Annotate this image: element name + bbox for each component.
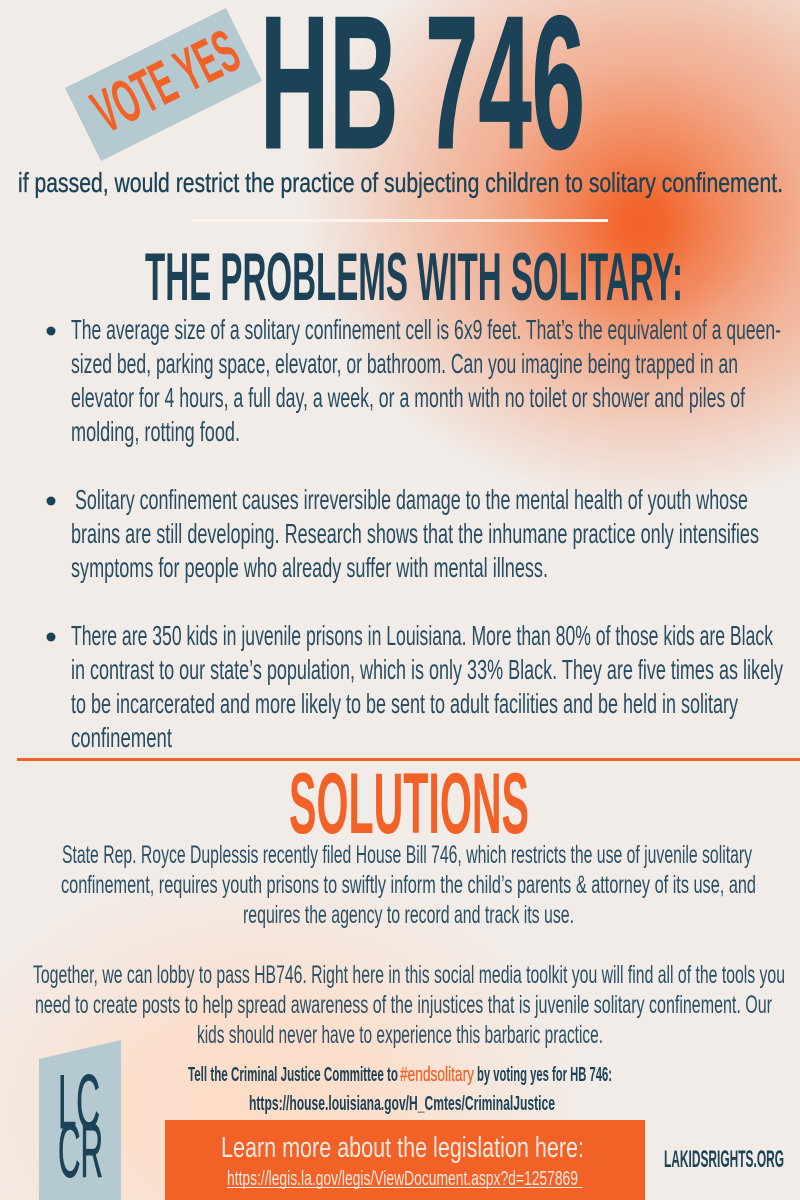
text block: solutions paragraph 2 xyxy=(33,961,785,1049)
bullet 3: confinement xyxy=(71,722,172,753)
logo: LCCR: CR xyxy=(58,1109,103,1194)
call to action: committee: Tell the Criminal Justice Committee to xyxy=(188,1064,398,1086)
bullet 1: molding, rotting food. xyxy=(71,416,240,447)
bullet 2: symptoms for people who already suffer with mental illness. xyxy=(71,552,548,583)
call to action: committee: #endsolitary xyxy=(400,1064,474,1086)
call to action: committee: https://house.louisiana.gov/H_Cmtes/CriminalJustice xyxy=(249,1093,555,1115)
call to action: committee xyxy=(188,1064,612,1115)
logo: LCCR: LC xyxy=(58,1060,100,1145)
text block: solutions paragraph 1: requires the agency to record and track its use. xyxy=(243,901,574,929)
bullet 1 xyxy=(46,314,781,447)
badge: vote yes xyxy=(65,8,262,161)
bullet 3 xyxy=(46,620,783,753)
infographic page: SOLUTIONS xyxy=(289,756,529,852)
bullet 2 xyxy=(46,484,759,583)
call to action: committee: by voting yes for HB 746: xyxy=(477,1064,612,1086)
panel: learn more xyxy=(165,1120,645,1200)
panel: problems list xyxy=(46,314,783,753)
logo: LCCR xyxy=(39,1040,121,1200)
text block: solutions paragraph 1 xyxy=(61,841,756,929)
panel: learn more: Learn more about the legislation here: xyxy=(221,1132,584,1164)
panel: learn more: https://legis.la.gov/legis/ViewDocument.aspx?d=1257869 xyxy=(227,1168,578,1190)
